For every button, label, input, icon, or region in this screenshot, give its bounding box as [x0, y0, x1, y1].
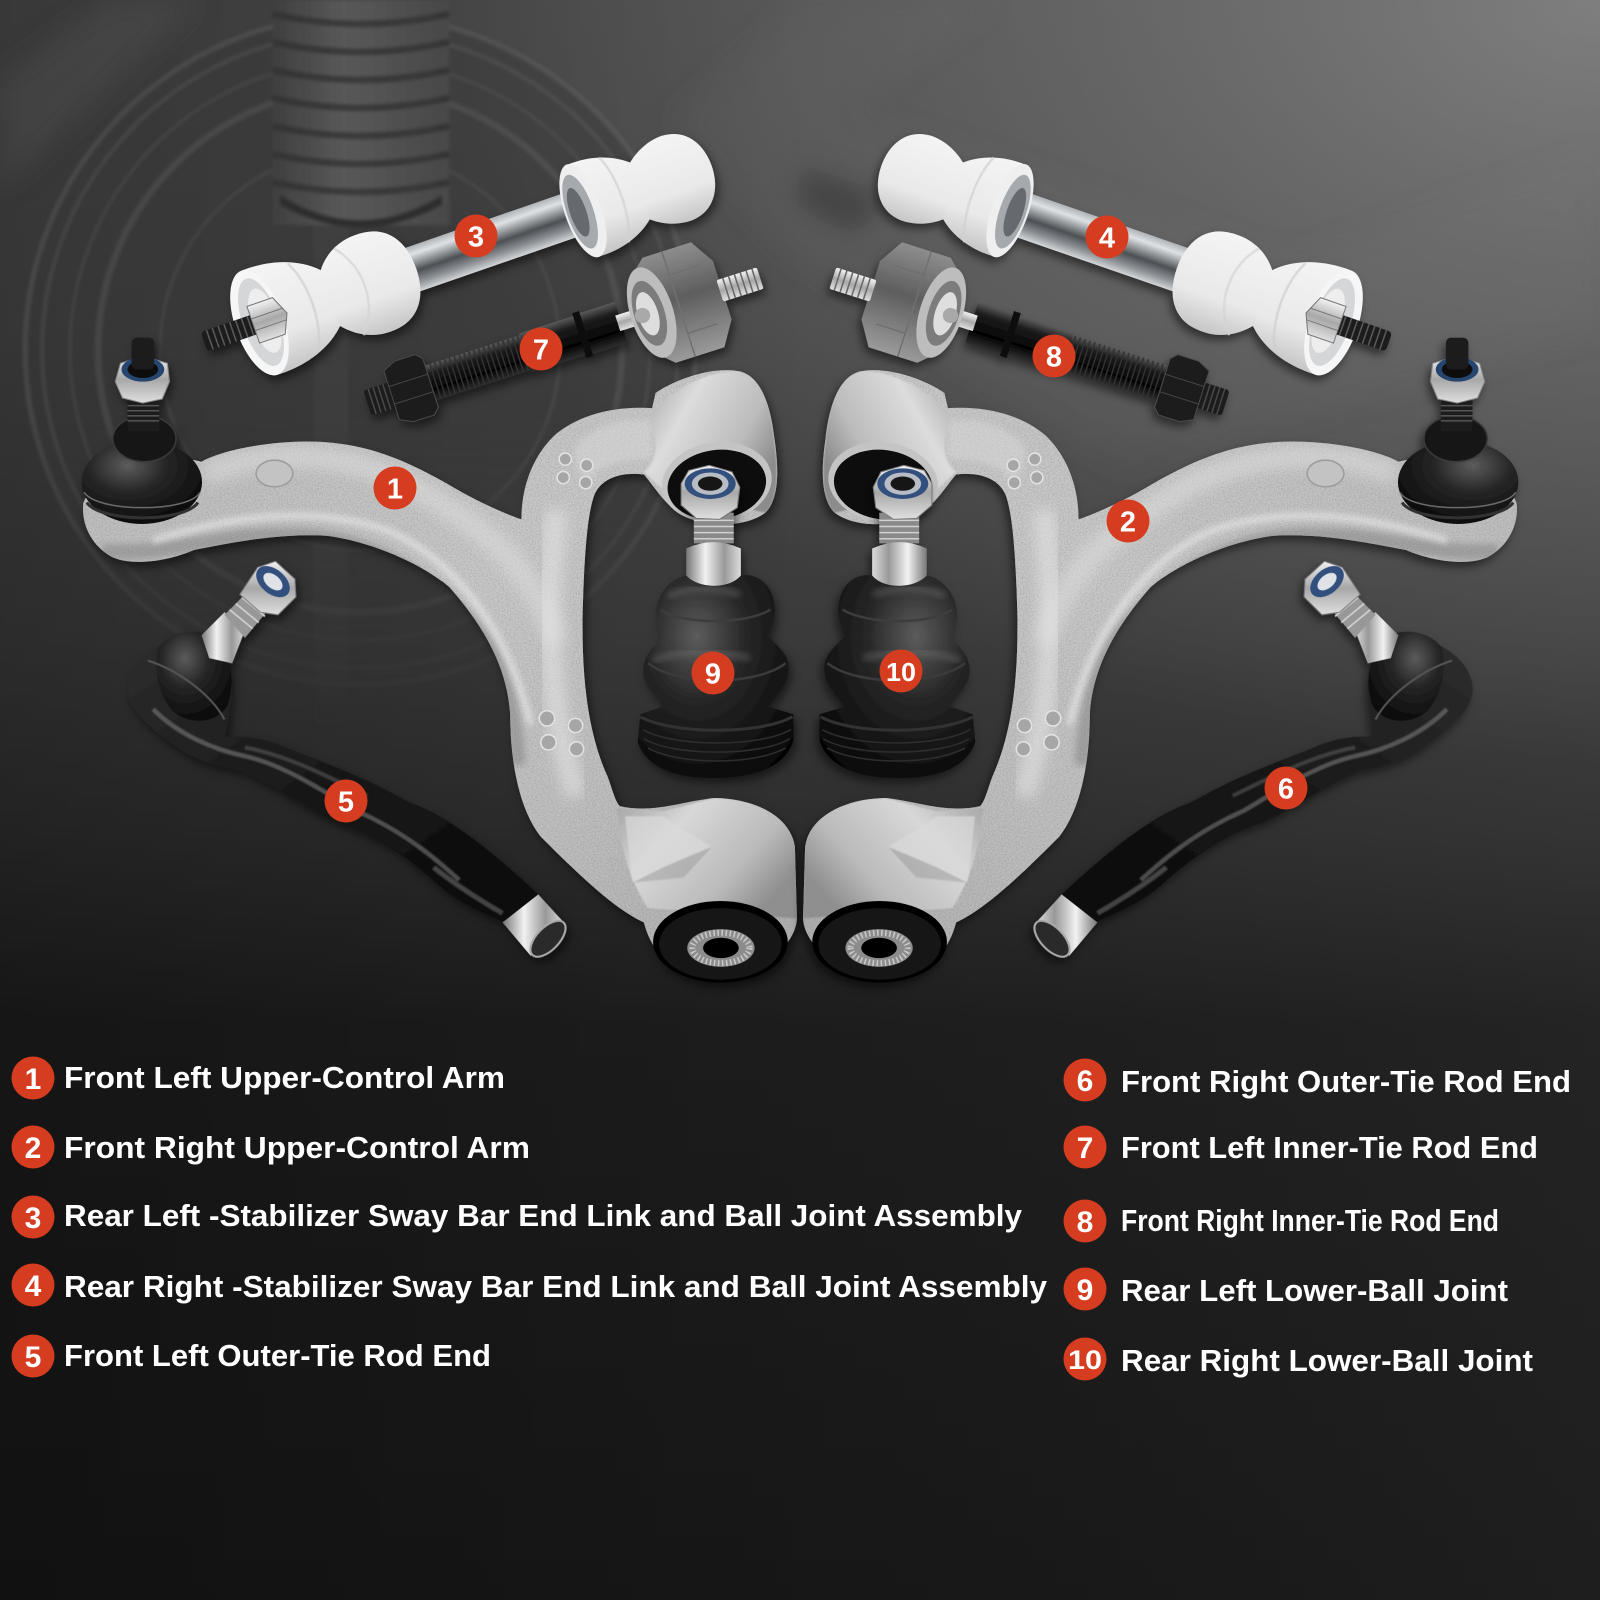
badge 5: 5: [338, 786, 354, 818]
part 1: front left upper control arm: [82, 338, 797, 983]
part 8: front right inner tie rod: [816, 226, 1242, 456]
part 5: front left outer tie rod end: [127, 560, 572, 963]
legend item 7: 7: [1077, 1132, 1093, 1165]
part 6: front right outer tie rod end: [1028, 560, 1473, 963]
ghosted suspension photo behind the parts: [12, 0, 870, 612]
legend item 8: 8: [1077, 1206, 1093, 1239]
badge 4: [1086, 216, 1128, 258]
part 7: front left inner tie rod: [351, 226, 777, 456]
badge 9: 9: [705, 658, 721, 690]
badge 7: 7: [533, 334, 549, 366]
badge 1: 1: [387, 474, 403, 506]
badge 6: 6: [1278, 774, 1294, 806]
legend item 8: [1064, 1200, 1499, 1242]
badge 8: [1032, 334, 1076, 378]
legend item 10: Rear Right Lower-Ball Joint: [1121, 1343, 1533, 1378]
badge 5: [324, 780, 368, 822]
legend item 1: 1: [25, 1063, 41, 1096]
part 9: rear left lower ball joint: [638, 465, 793, 778]
legend item 6: 6: [1077, 1065, 1093, 1098]
badge 10: 10: [886, 657, 916, 687]
legend item 4: Rear Right -Stabilizer Sway Bar End Link and Ball Joint Assembly: [64, 1269, 1048, 1304]
legend item 4: 4: [25, 1270, 42, 1303]
legend: right column: [1064, 1058, 1571, 1380]
legend item 1: Front Left Upper-Control Arm: [64, 1060, 505, 1095]
badge 3: 3: [468, 222, 484, 254]
badge 4: 4: [1099, 222, 1115, 254]
legend item 10: 10: [1068, 1345, 1102, 1375]
badge 1: [374, 466, 416, 510]
number badges on parts: [324, 214, 1308, 822]
badge 3: [454, 214, 498, 258]
badge 6: [1264, 766, 1308, 810]
badge 8: 8: [1046, 342, 1062, 374]
legend item 5: Front Left Outer-Tie Rod End: [64, 1338, 491, 1373]
legend item 2: 2: [25, 1132, 41, 1165]
badge 9: [692, 652, 734, 694]
legend: left column: [12, 1056, 1048, 1378]
legend item 3: Rear Left -Stabilizer Sway Bar End Link and Ball Joint Assembly: [64, 1198, 1023, 1233]
legend item 5: 5: [25, 1341, 41, 1374]
part 2: front right upper control arm: [803, 338, 1518, 983]
badge 2: [1106, 500, 1150, 542]
part 10: rear right lower ball joint: [820, 465, 975, 778]
legend item 7: Front Left Inner-Tie Rod End: [1121, 1130, 1538, 1165]
legend item 3: 3: [25, 1202, 41, 1235]
part 3: rear left stabilizer link: [186, 114, 730, 394]
legend item 6: Front Right Outer-Tie Rod End: [1121, 1064, 1571, 1099]
legend item 2: Front Right Upper-Control Arm: [64, 1130, 530, 1165]
badge 2: 2: [1120, 506, 1136, 538]
badge 10: [880, 650, 922, 692]
legend item 8: Front Right Inner-Tie Rod End: [1121, 1203, 1499, 1238]
legend item 9: 9: [1077, 1274, 1093, 1307]
badge 7: [520, 328, 562, 370]
legend item 9: Rear Left Lower-Ball Joint: [1121, 1273, 1508, 1308]
part 4: rear right stabilizer link: [863, 114, 1407, 394]
